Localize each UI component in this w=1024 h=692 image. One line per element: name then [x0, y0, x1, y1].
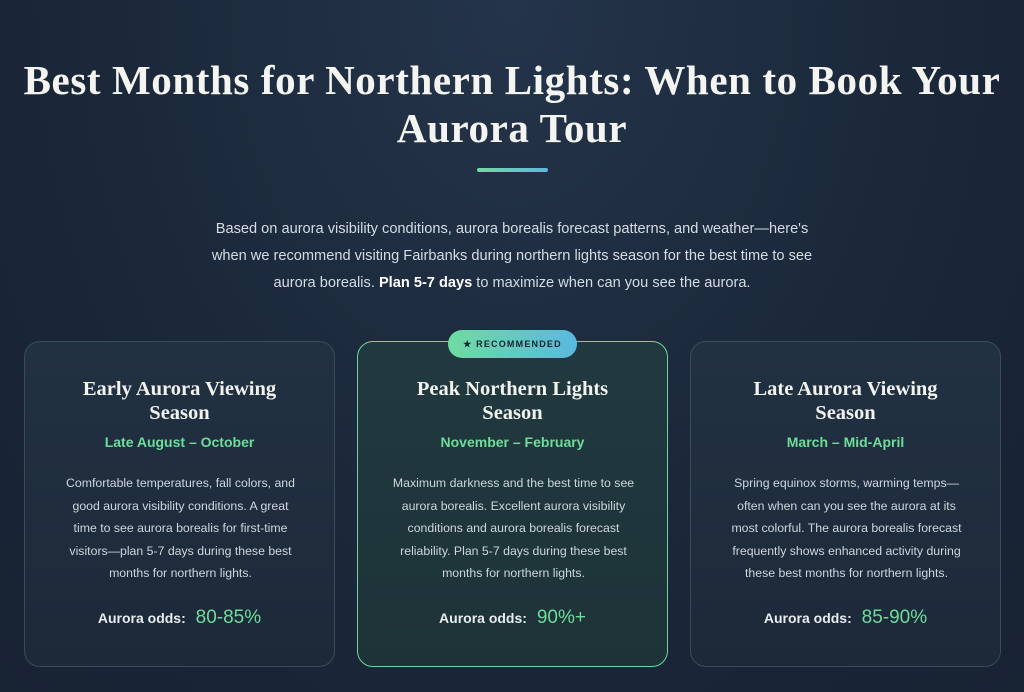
- panel: late season: [690, 341, 1001, 667]
- description: time to see aurora borealis for first-time: [74, 521, 287, 535]
- intro text: when we recommend visiting Fairbanks during northern lights season for the best time to see: [212, 248, 812, 264]
- date range: Late August – October: [105, 434, 254, 450]
- panel: early season: [24, 341, 335, 667]
- title: Best Months for Northern Lights: When to Book Your: [24, 57, 1000, 103]
- description: aurora borealis. Excellent aurora visibility: [402, 498, 625, 512]
- heading: Late Aurora Viewing: [753, 378, 938, 400]
- panel: peak season: [357, 341, 668, 667]
- description: frequently shows enhanced activity during: [732, 544, 961, 558]
- description: [731, 476, 962, 580]
- heading: [417, 378, 608, 424]
- heading: Season: [815, 402, 876, 424]
- description: months for northern lights.: [442, 566, 585, 580]
- title: Aurora Tour: [397, 105, 627, 151]
- odds: Aurora odds: 80-85%: [98, 607, 261, 628]
- accent bar: [477, 168, 548, 172]
- date range: March – Mid-April: [787, 434, 904, 450]
- intro text: [212, 221, 812, 291]
- heading: Season: [149, 402, 210, 424]
- heading: [83, 378, 276, 424]
- description: Comfortable temperatures, fall colors, and: [66, 476, 295, 490]
- heading: Season: [482, 402, 543, 424]
- description: months for northern lights.: [109, 566, 252, 580]
- date range: November – February: [441, 434, 584, 450]
- description: often when can you see the aurora at its: [737, 498, 956, 512]
- odds: Aurora odds: 85-90%: [764, 607, 927, 628]
- intro text: Based on aurora visibility conditions, aurora borealis forecast patterns, and weather—here's: [216, 221, 808, 237]
- heading: Peak Northern Lights: [417, 378, 608, 400]
- badge: recommended: ★ RECOMMENDED: [463, 339, 562, 349]
- description: reliability. Plan 5-7 days during these best: [400, 544, 627, 558]
- description: Maximum darkness and the best time to see: [393, 476, 634, 490]
- description: Spring equinox storms, warming temps—: [734, 476, 959, 490]
- description: conditions and aurora borealis forecast: [408, 521, 619, 535]
- intro text: aurora borealis. Plan 5-7 days to maximize when can you see the aurora.: [273, 275, 750, 291]
- title: [24, 57, 1000, 151]
- heading: [753, 378, 938, 424]
- odds: Aurora odds: 90%+: [439, 607, 586, 628]
- description: visitors—plan 5-7 days during these best: [69, 544, 292, 558]
- description: [66, 476, 295, 580]
- heading: Early Aurora Viewing: [83, 378, 276, 400]
- badge: recommended: [448, 330, 577, 358]
- description: these best months for northern lights.: [745, 566, 948, 580]
- description: good aurora visibility conditions. A great: [72, 498, 288, 512]
- description: [393, 476, 634, 580]
- description: most colorful. The aurora borealis forecast: [731, 521, 962, 535]
